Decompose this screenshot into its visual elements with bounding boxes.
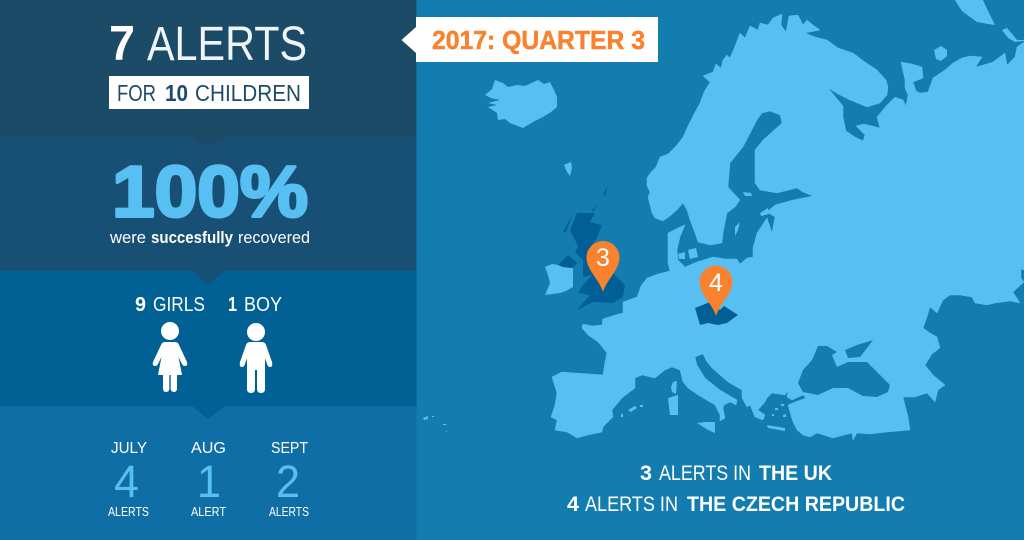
- islands: Danish: [678, 248, 698, 259]
- tag: 2017 quarter 3: 2017: QUARTER 3: [432, 25, 645, 55]
- text: alerts in the UK: ALERTS IN: [659, 462, 751, 485]
- column: September: 2: [276, 456, 300, 507]
- icon: girl: [153, 322, 187, 392]
- text: alerts in the UK: THE UK: [759, 462, 832, 485]
- island: Novaya Zemlya: [955, 0, 1024, 42]
- islands: Aegean: [772, 404, 786, 417]
- label: 9 girls: [135, 294, 205, 316]
- heading: 7 alerts: ALERTS: [147, 18, 307, 71]
- column: September: ALERTS: [269, 504, 309, 519]
- label: for 10 children: 10: [165, 80, 188, 106]
- islands: Baltic: [735, 192, 769, 236]
- label: for 10 children: [109, 76, 309, 109]
- panel: girls and boys: [0, 271, 416, 406]
- heading: 7 alerts: 7: [109, 17, 135, 71]
- column: September: SEPT: [271, 440, 308, 457]
- country highlight: Czech Republic: [695, 302, 738, 325]
- stat: 100%: 100%: [112, 152, 308, 232]
- column: July: ALERTS: [108, 504, 149, 519]
- arrow: [192, 406, 225, 419]
- column: September: [269, 440, 309, 519]
- column: August: AUG: [191, 440, 226, 457]
- caption: recovered: recovered: [238, 229, 310, 247]
- pin: UK, 3 alerts: 3: [596, 244, 610, 272]
- sea: Black Sea: [798, 346, 890, 397]
- caption: recovered: succesfully: [151, 229, 234, 247]
- column: July: 4: [114, 456, 139, 507]
- text: alerts in the Czech Republic: ALERTS IN: [585, 493, 678, 516]
- tag: 2017 quarter 3: [402, 17, 658, 62]
- island: Iceland: [485, 80, 557, 128]
- island: Sicily: [697, 422, 715, 433]
- country highlight: United Kingdom: [558, 185, 625, 310]
- column: July: JULY: [111, 440, 147, 457]
- map of Europe: [423, 0, 1024, 440]
- text: alerts in the Czech Republic: 4: [567, 493, 579, 516]
- label: 1 boy: BOY: [244, 294, 282, 316]
- arrow: [192, 271, 225, 284]
- island: Corsica: [671, 381, 677, 394]
- icon: boy: [240, 323, 272, 393]
- column: August: ALERT: [191, 504, 226, 519]
- caption: recovered: [109, 229, 310, 247]
- pin: UK, 3 alerts: [586, 241, 620, 292]
- panel: monthly breakdown: [0, 406, 416, 540]
- text: alerts in the Czech Republic: THE CZECH REPUBLIC: [687, 493, 905, 516]
- column: July: [108, 440, 149, 519]
- label: for 10 children: CHILDREN: [195, 80, 301, 106]
- island: Crete: [767, 425, 785, 431]
- pin: Czech Republic, 4 alerts: [700, 266, 732, 316]
- pin: Czech Republic, 4 alerts: 4: [709, 269, 723, 297]
- text: alerts in the UK: 3: [640, 462, 652, 485]
- sea: Sea of Azov: [845, 340, 873, 358]
- caption: recovered: were: [109, 229, 146, 247]
- label: for 10 children: FOR: [117, 80, 156, 106]
- island: Sardinia: [668, 395, 678, 415]
- text: alerts in the UK: [640, 462, 832, 485]
- column: August: 1: [197, 456, 221, 507]
- islands: Azores: [423, 416, 447, 432]
- arrow: [192, 136, 225, 148]
- column: August: [191, 440, 226, 519]
- islands: Faroe: [564, 162, 572, 176]
- label: 9 girls: 9: [135, 294, 146, 316]
- label: 1 boy: 1: [228, 294, 237, 316]
- text: alerts in the Czech Republic: [567, 493, 905, 516]
- label: 1 boy: [228, 294, 282, 316]
- land mass: [551, 14, 1024, 440]
- label: 9 girls: GIRLS: [153, 294, 205, 316]
- island: Kolguev: [934, 46, 947, 61]
- panel: total alerts: [0, 0, 416, 136]
- islands: Balearic: [621, 405, 643, 417]
- panel: recovery rate: [0, 136, 416, 271]
- island: Ireland: [545, 264, 573, 295]
